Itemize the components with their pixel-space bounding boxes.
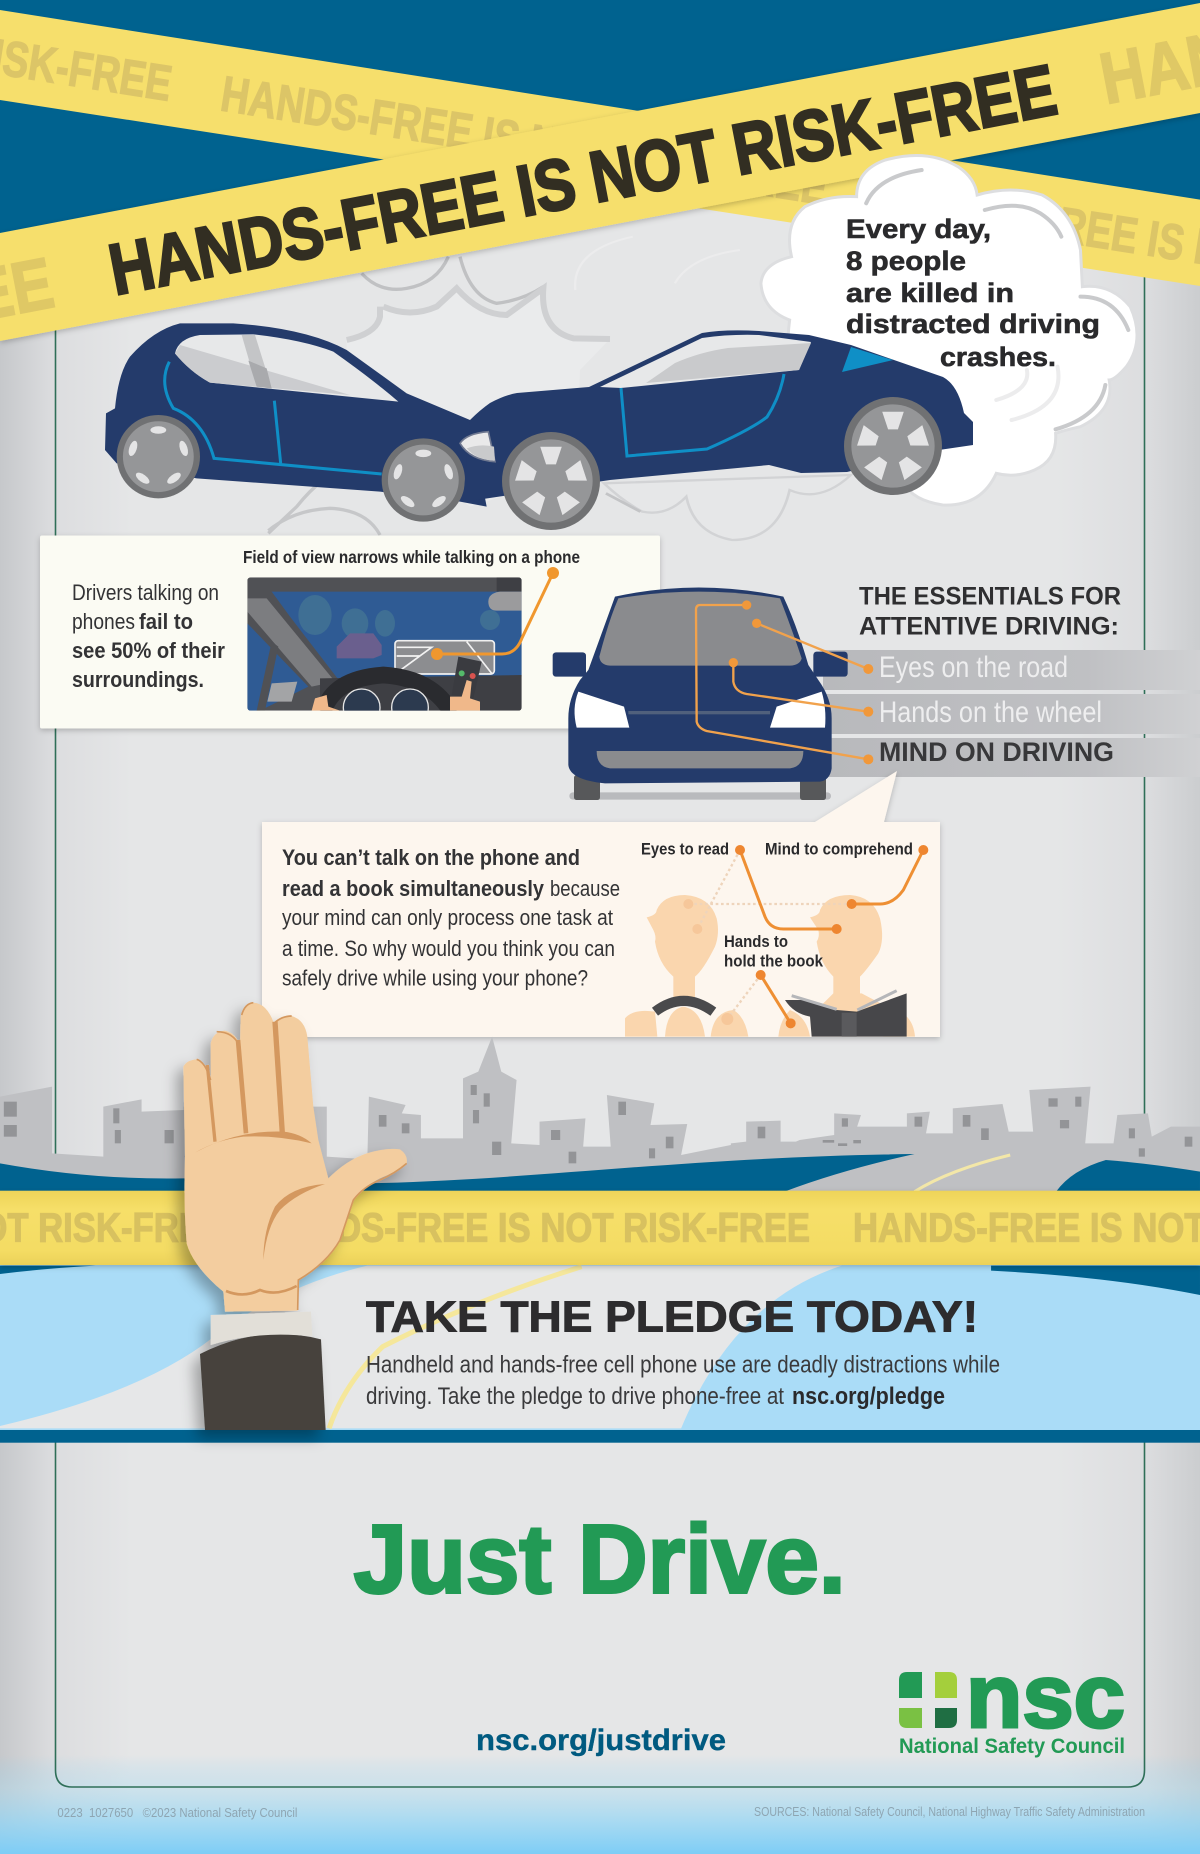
attention pointers (683, 845, 928, 1028)
blue top header area (0, 0, 1200, 280)
panel text: fail to (139, 609, 193, 634)
heading: essentials (859, 582, 1121, 640)
labels: hold the book (724, 952, 824, 970)
callout text: because (550, 876, 620, 901)
cloud text (846, 214, 1100, 372)
pledge heading: TAKE THE PLEDGE TODAY! (366, 1293, 978, 1342)
ribbon: main headline tape (0, 3, 1200, 344)
car: front view (553, 587, 848, 800)
panel: field of view (40, 536, 660, 728)
cloud text: 8 people (846, 246, 966, 276)
callout text: safely drive while using your phone? (282, 966, 588, 990)
labels: Mind to comprehend (765, 840, 913, 858)
callout text (282, 845, 620, 990)
logo: National Safety Council (899, 1647, 1125, 1758)
field-of-view pointer (431, 567, 559, 660)
crash burst smoke (268, 237, 851, 540)
skyline and road (0, 1037, 1200, 1430)
cloud text: distracted driving (846, 309, 1100, 339)
icon: raised hand (183, 1003, 407, 1430)
essentials list: Eyes on the road (879, 651, 1068, 684)
callout tail and panel: book comparison (262, 771, 940, 1037)
pledge text: nsc.org/pledge (792, 1383, 945, 1410)
pledge text: Handheld and hands-free cell phone use are deadly distractions while (366, 1352, 1000, 1379)
panel text: surroundings. (72, 667, 204, 692)
smoke cloud (761, 155, 1137, 505)
pledge text (366, 1352, 1000, 1410)
labels: Hands to (724, 933, 788, 951)
logo: National Safety Council: National Safety Council (899, 1735, 1125, 1758)
car: right sports car (460, 330, 973, 530)
ribbon: background caution tape: HANDS-FREE IS NOT RISK-FREE (217, 66, 832, 216)
panel text: see 50% of their (72, 638, 225, 663)
tape band (0, 1191, 1200, 1265)
cloud text: are killed in (846, 278, 1014, 308)
panel text (72, 580, 225, 692)
pledge bar (0, 1430, 1200, 1443)
logo: National Safety Council: nsc (966, 1647, 1125, 1747)
callout text: read a book simultaneously (282, 876, 544, 901)
panel text: Drivers talking on (72, 580, 219, 605)
ribbon: background caution tape (0, 10, 1200, 286)
essentials pointers (696, 600, 873, 764)
labels (641, 840, 913, 970)
pledge text: driving. Take the pledge to drive phone-free at (366, 1383, 784, 1410)
figures: driver and reader (625, 895, 915, 1037)
cloud text: crashes. (940, 342, 1056, 372)
panel heading: Field of view narrows while talking on a phone (243, 547, 580, 567)
cloud text: Every day, (846, 214, 991, 244)
essentials list (879, 651, 1114, 767)
heading: essentials: ATTENTIVE DRIVING: (859, 612, 1119, 640)
callout text: You can’t talk on the phone and (282, 845, 580, 870)
callout text: a time. So why would you think you can (282, 936, 615, 961)
tape band: HANDS-FREE IS NOT RISK-FREE (261, 1205, 810, 1251)
heading: essentials: THE ESSENTIALS FOR (859, 582, 1121, 610)
essentials bars (823, 650, 1200, 777)
footer credits: 0223 1027650 ©2023 National Safety Council (57, 1806, 297, 1820)
driver view illustration (247, 577, 522, 726)
essentials list: Hands on the wheel (879, 696, 1102, 729)
panel text: phones (72, 609, 135, 634)
essentials list: MIND ON DRIVING (879, 737, 1114, 767)
callout text: your mind can only process one task at (282, 905, 614, 930)
website link: nsc.org/justdrive (476, 1724, 726, 1757)
car: left hatchback (105, 323, 487, 522)
labels: Eyes to read (641, 840, 729, 858)
slogan: Just Drive. (354, 1505, 846, 1614)
footer credits (57, 1805, 1145, 1820)
